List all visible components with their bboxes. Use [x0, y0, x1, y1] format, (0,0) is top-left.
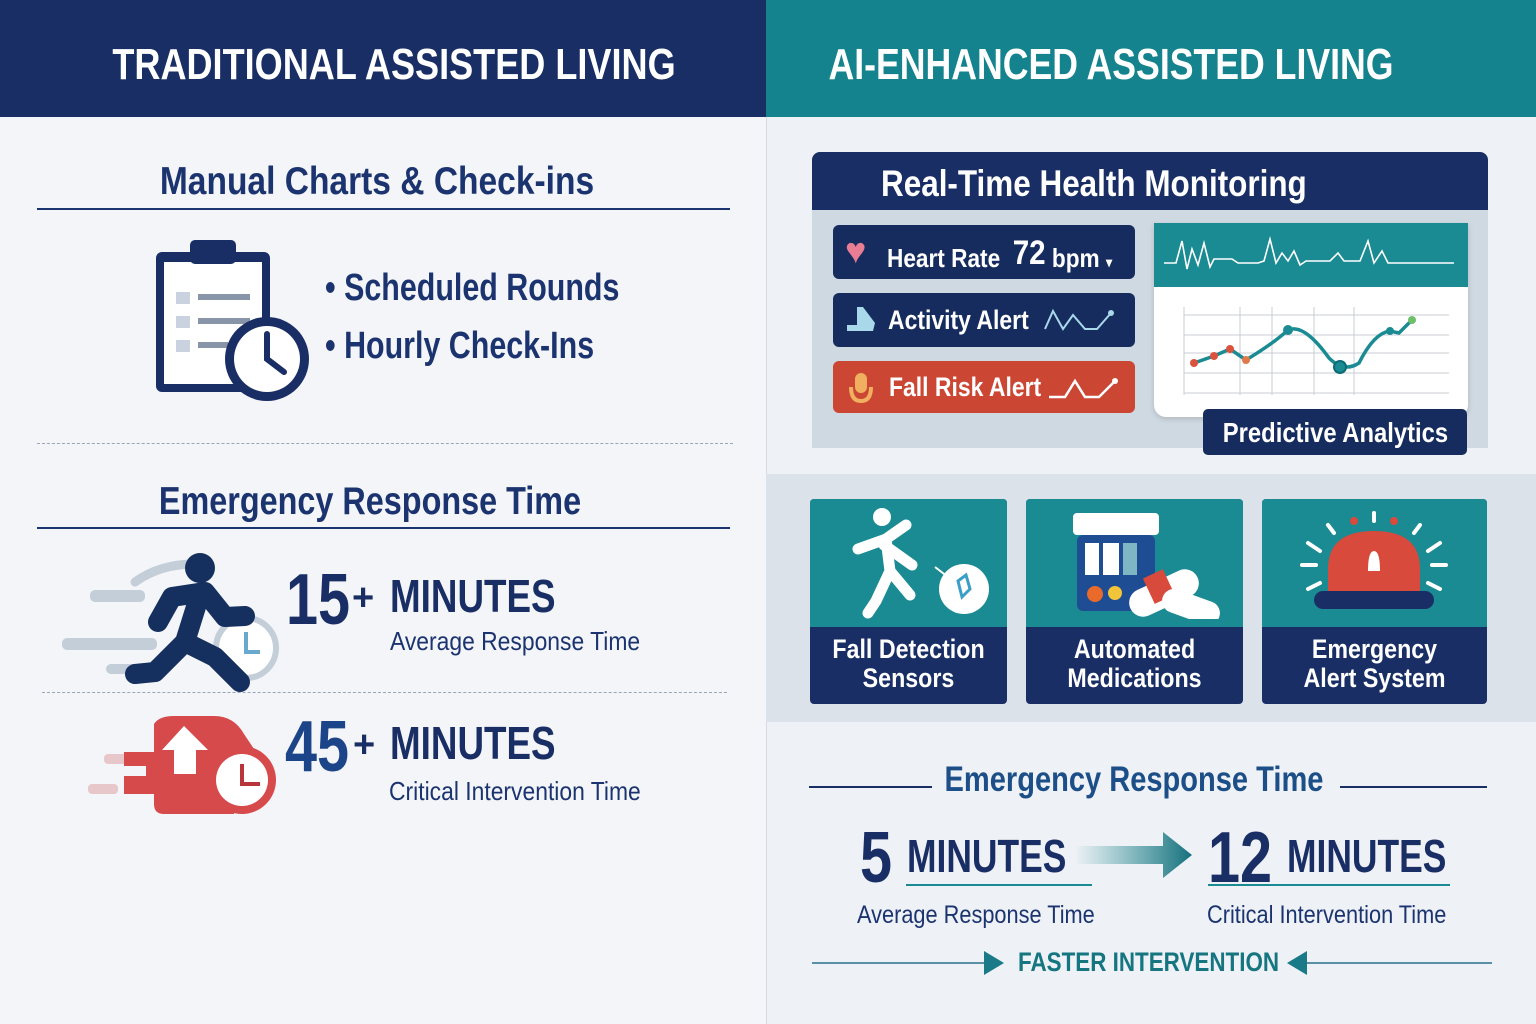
stat: 5 minutes: MINUTES — [907, 830, 1066, 882]
card: fall detection sensors: Sensors — [863, 663, 954, 693]
icon: runner with clock — [62, 553, 279, 692]
bullet list: • Hourly Check-Ins — [325, 325, 594, 367]
stat: 15+ minutes: 15 — [286, 560, 350, 640]
stat: 45+ minutes — [285, 707, 556, 787]
card: heart rate — [833, 225, 1135, 279]
heading: emergency response time (left): Emergency Response Time — [159, 480, 581, 523]
card: heart rate: Heart Rate 72 bpm ▾ — [887, 234, 1112, 273]
label: predictive analytics: Predictive Analytics — [1223, 417, 1448, 448]
card: automated medications: Automated — [1074, 634, 1195, 664]
heading bar: Real-Time Health Monitoring — [881, 163, 1307, 204]
chart: predictive analytics — [1154, 223, 1468, 417]
bullet list — [325, 267, 619, 367]
stat: 12 minutes: 12 — [1208, 818, 1272, 898]
stat: 12 minutes: MINUTES — [1287, 830, 1446, 882]
heading bar — [812, 152, 1488, 210]
callout: faster intervention — [812, 947, 1492, 977]
stat: 12 minutes — [1208, 818, 1446, 898]
panel: real-time health monitoring — [812, 152, 1488, 448]
heading: emergency response time (right) — [809, 786, 932, 788]
icon: red speeding alert with clock — [88, 716, 276, 814]
card: emergency alert system — [1262, 499, 1487, 704]
label: average response time: Average Response Time — [390, 626, 640, 656]
header: AI-enhanced: AI-ENHANCED ASSISTED LIVING — [828, 40, 1394, 89]
stat: 15+ minutes: MINUTES — [390, 570, 556, 622]
stat: 5 minutes: 5 — [860, 818, 892, 898]
card: heart rate: ♥ — [845, 230, 866, 271]
stat: 15+ minutes — [286, 560, 556, 640]
icon: clipboard with clock — [156, 240, 309, 401]
label: average response time (right): Average Response Time — [857, 901, 1095, 929]
callout: faster intervention: FASTER INTERVENTION — [1018, 947, 1279, 977]
label: critical intervention time (right): Critical Intervention Time — [1207, 901, 1446, 929]
card: activity alert — [833, 293, 1135, 347]
card: fall risk alert — [833, 361, 1135, 413]
card: fall detection sensors: Fall Detection — [832, 634, 985, 664]
header: traditional: TRADITIONAL ASSISTED LIVING — [112, 40, 676, 89]
stat: 45+ minutes: 45 — [285, 707, 349, 787]
card: emergency alert system: Alert System — [1304, 663, 1445, 693]
label: critical intervention time: Critical Intervention Time — [389, 776, 641, 806]
band: feature cards — [766, 474, 1536, 722]
left background — [0, 0, 766, 1024]
card: activity alert: Activity Alert — [888, 305, 1029, 335]
card: emergency alert system: Emergency — [1312, 634, 1437, 664]
header: traditional — [0, 0, 766, 117]
card: automated medications — [1026, 499, 1243, 704]
arrow: gradient — [1080, 832, 1192, 878]
card: fall detection sensors — [810, 499, 1007, 704]
card: fall risk alert: Fall Risk Alert — [889, 372, 1041, 402]
right background — [766, 0, 1536, 1024]
label: predictive analytics — [1203, 409, 1467, 455]
stat: 45+ minutes: + — [353, 724, 375, 766]
header: AI-enhanced — [766, 0, 1536, 117]
stat: 45+ minutes: MINUTES — [390, 717, 556, 769]
heading: manual charts: Manual Charts & Check-ins — [160, 160, 594, 203]
stat: 5 minutes — [860, 818, 1066, 898]
stat: 15+ minutes: + — [352, 577, 374, 619]
card: automated medications: Medications — [1067, 663, 1202, 693]
text: Emergency Response Time — [945, 760, 1323, 799]
bullet list: • Scheduled Rounds — [325, 267, 619, 309]
